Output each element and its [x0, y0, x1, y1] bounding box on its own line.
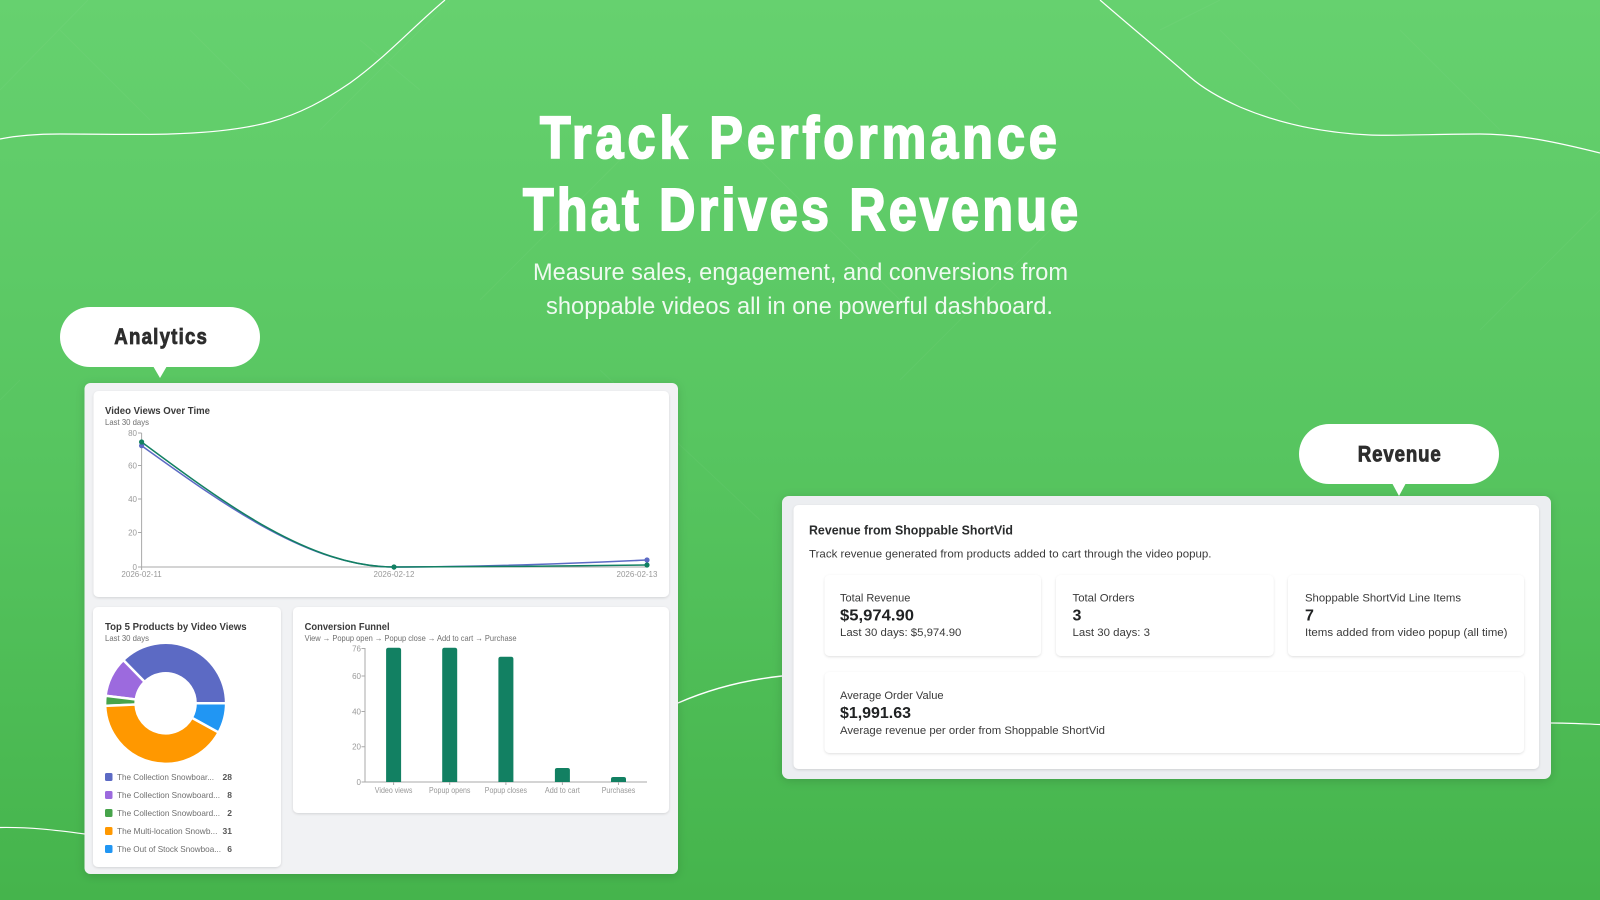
- subtitle: [533, 259, 1068, 320]
- title: That Drives Revenue: [523, 176, 1078, 243]
- donut legend: The Multi-location Snowb...: [117, 826, 217, 836]
- bar chart: [352, 644, 647, 795]
- card heading: Conversion Funnel: [305, 621, 390, 633]
- donut legend: The Collection Snowboar...: [117, 772, 214, 782]
- stat: average order value: Average revenue per order from Shoppable ShortVid: [840, 725, 1105, 737]
- stat: line items: Items added from video popup (all time): [1305, 627, 1508, 639]
- bar chart: 76: [352, 644, 362, 654]
- line chart: 20: [128, 528, 138, 538]
- revenue description: Track revenue generated from products added to cart through the video popup.: [809, 548, 1212, 560]
- panel: analytics dashboard: [84, 383, 678, 874]
- bar chart: Video views: [375, 786, 412, 795]
- bar chart: Add to cart: [545, 786, 581, 795]
- card heading: Top 5 Products by Video Views: [105, 621, 247, 633]
- card: top 5 products: [93, 607, 281, 867]
- stat: total orders: 3: [1072, 608, 1082, 624]
- stat: line items: 7: [1305, 608, 1314, 624]
- donut legend: 31: [223, 826, 232, 836]
- stat: total revenue: [825, 575, 1041, 656]
- donut legend: [105, 772, 232, 854]
- donut legend: The Collection Snowboard...: [117, 790, 220, 800]
- stat: total orders: [1056, 575, 1274, 656]
- stat: total revenue: $5,974.90: [840, 608, 914, 624]
- donut chart: [105, 643, 226, 764]
- donut legend: 2: [227, 808, 232, 818]
- stat: total orders: Last 30 days: 3: [1072, 627, 1150, 639]
- donut legend: The Out of Stock Snowboa...: [117, 844, 221, 854]
- stat: average order value: Average Order Value: [840, 690, 944, 702]
- line chart: 60: [128, 462, 138, 470]
- card heading: Video Views Over Time: [105, 405, 210, 417]
- card: video views over time: [94, 391, 669, 597]
- card subheading: Last 30 days: [105, 417, 149, 427]
- line chart: 2026-02-12: [374, 570, 415, 579]
- donut legend: The Collection Snowboard...: [117, 808, 220, 818]
- bar chart: 60: [352, 672, 362, 681]
- connector curve: lower left: [0, 827, 85, 834]
- stat: line items: [1288, 575, 1524, 656]
- card subheading: Last 30 days: [105, 633, 149, 643]
- stat: total orders: Total Orders: [1072, 592, 1135, 604]
- donut legend: 8: [227, 790, 232, 800]
- donut legend: 28: [223, 772, 232, 782]
- stat: total revenue: Total Revenue: [840, 592, 910, 604]
- donut legend: 6: [227, 844, 232, 854]
- title: [523, 104, 1078, 243]
- callout: analytics: [60, 307, 260, 378]
- bar chart: Purchases: [602, 786, 635, 795]
- line chart: 80: [128, 429, 138, 438]
- callout: analytics: Analytics: [114, 326, 207, 349]
- stat: total revenue: Last 30 days: $5,974.90: [840, 627, 961, 639]
- stat: average order value: [825, 672, 1524, 753]
- subtitle: shoppable videos all in one powerful dashboard.: [546, 293, 1053, 320]
- card: conversion funnel: [293, 607, 669, 813]
- title: Track Performance: [540, 104, 1057, 171]
- panel: revenue dashboard: [782, 496, 1551, 779]
- decorative curve: top right: [1100, 0, 1600, 153]
- bar chart: 20: [352, 743, 362, 752]
- callout: revenue: [1299, 424, 1499, 496]
- line chart: 0: [133, 563, 138, 572]
- decorative curve: top left: [0, 0, 445, 139]
- connector curve: analytics to revenue: [678, 676, 782, 703]
- stat: average order value: $1,991.63: [840, 705, 911, 722]
- connector curve: right edge: [1551, 723, 1600, 724]
- callout: revenue: Revenue: [1358, 443, 1441, 467]
- bar chart: 0: [357, 778, 362, 787]
- line chart: [121, 429, 658, 579]
- line chart: 2026-02-11: [121, 570, 162, 579]
- bar chart: Popup closes: [485, 786, 527, 795]
- revenue heading: Revenue from Shoppable ShortVid: [809, 522, 1013, 538]
- stat: line items: Shoppable ShortVid Line Items: [1305, 592, 1461, 604]
- subtitle: Measure sales, engagement, and conversions from: [533, 259, 1068, 286]
- line chart: 40: [128, 495, 138, 504]
- line chart: 2026-02-13: [617, 570, 658, 579]
- card: revenue summary: [794, 505, 1539, 769]
- bar chart: 40: [352, 708, 362, 716]
- card subheading: View → Popup open → Popup close → Add to cart → Purchase: [305, 633, 517, 643]
- bar chart: Popup opens: [429, 786, 470, 795]
